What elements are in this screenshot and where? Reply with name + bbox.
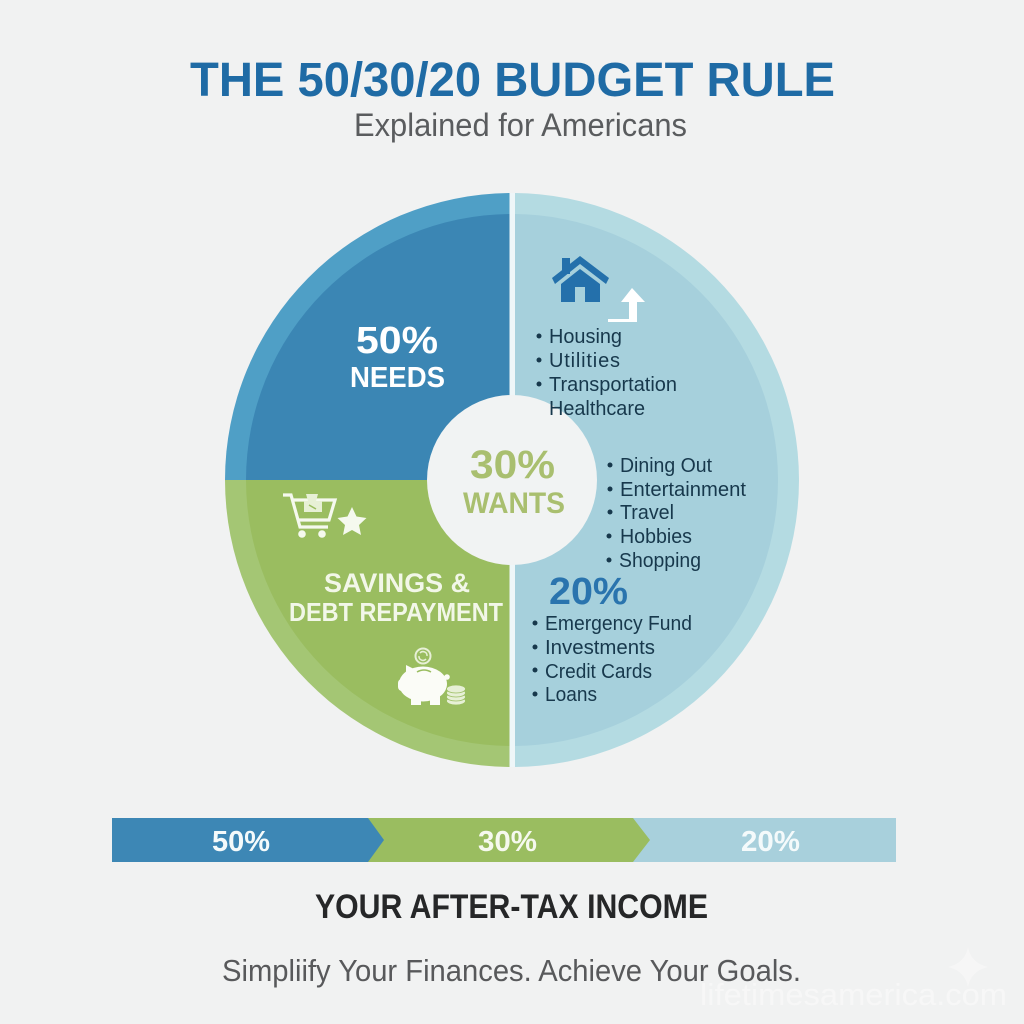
panel: savings and debt repayment segment: DEBT REPAYMENT — [289, 597, 503, 627]
title: THE 50/30/20 BUDGET RULE — [190, 54, 835, 107]
list: wants items: Dining Out — [620, 455, 712, 477]
icon: watermark sparkle — [948, 947, 988, 987]
list: wants items: Shopping — [619, 550, 701, 572]
panel: needs segment: NEEDS — [350, 362, 445, 394]
list: savings items — [532, 613, 692, 706]
icon: star — [338, 507, 366, 535]
watermark: lifetimesamerica.com — [700, 977, 1007, 1012]
tagline: Simpliify Your Finances. Achieve Your Goals. — [222, 953, 801, 988]
bar segment: 30 percent: 30% — [478, 826, 537, 858]
bar segment: 20 percent: 20% — [741, 826, 800, 858]
list: savings items: Investments — [545, 637, 655, 659]
list: needs items: Utilities — [549, 350, 620, 372]
icon: coin stack — [446, 685, 466, 705]
bar segment: 30 percent — [360, 818, 650, 862]
list: savings items: Credit Cards — [545, 661, 652, 683]
icon: shopping cart — [283, 494, 335, 538]
panel: needs segment — [225, 193, 509, 480]
list: savings items: Emergency Fund — [545, 613, 692, 635]
panel: wants and savings list segment — [515, 193, 799, 767]
pie chart — [225, 193, 799, 767]
list: savings items: Loans — [545, 684, 597, 706]
panel: needs segment: 50% — [356, 320, 438, 362]
list: wants items — [606, 455, 746, 572]
panel: savings and debt repayment segment — [225, 480, 510, 767]
list: needs items: Housing — [549, 326, 622, 348]
bar segment: 50 percent — [112, 818, 384, 862]
bar segment: 20 percent — [620, 818, 896, 862]
icon: up arrow — [608, 288, 645, 322]
bar segment: 50 percent: 50% — [212, 826, 270, 858]
center hub — [427, 395, 597, 565]
list: needs items: Transportation — [549, 374, 677, 396]
divider gap — [510, 193, 515, 767]
proportion bar — [112, 818, 896, 862]
list: needs items — [536, 326, 677, 420]
center hub: 30% — [470, 443, 555, 487]
icon: piggy bank — [398, 648, 450, 705]
savings percent: 20% — [549, 571, 628, 613]
icon: house — [552, 256, 609, 302]
subtitle: Explained for Americans — [354, 107, 687, 143]
panel: savings and debt repayment segment: SAVINGS & — [324, 568, 470, 598]
income label: YOUR AFTER-TAX INCOME — [315, 888, 708, 926]
list: wants items: Entertainment — [620, 479, 746, 501]
list: wants items: Hobbies — [620, 526, 692, 548]
list: needs items: Healthcare — [549, 398, 645, 420]
list: wants items: Travel — [620, 502, 674, 524]
center hub: WANTS — [463, 487, 565, 520]
